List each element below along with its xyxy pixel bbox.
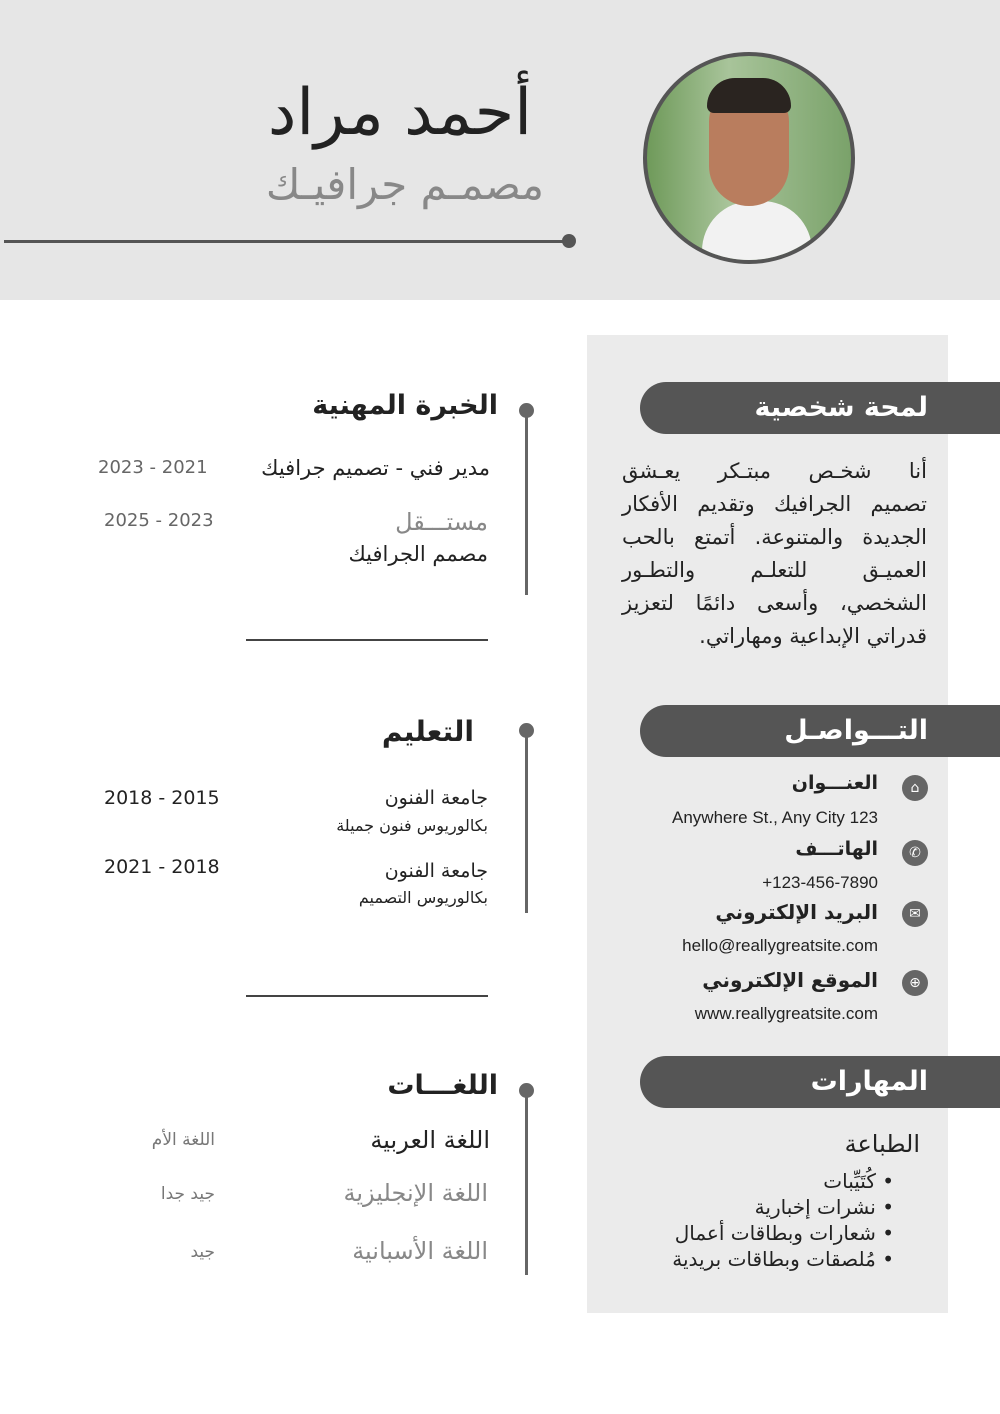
section: languages: جيد جدا	[161, 1184, 215, 1204]
photo	[643, 52, 855, 264]
icon: web: ⊕	[909, 975, 921, 991]
heading: profile	[640, 382, 1000, 434]
icon: web	[902, 970, 928, 996]
profile text: العميـق للتعلـم والتطـور	[622, 558, 927, 582]
section: education: 2021 - 2018	[104, 856, 220, 878]
section: experience: مدير فني - تصميم جرافيك	[261, 456, 490, 480]
section: education: جامعة الفنون	[385, 860, 488, 882]
section: experience: مستـــقل	[395, 508, 488, 536]
contact list: الموقع الإلكتروني	[702, 968, 878, 992]
section: experience	[98, 390, 498, 566]
section: languages: جيد	[190, 1242, 215, 1262]
icon: mail: ✉	[909, 906, 921, 922]
section: languages: اللغة الأسبانية	[352, 1237, 488, 1265]
icon: phone: ✆	[909, 845, 921, 861]
skills list: • نشرات إخبارية	[755, 1195, 894, 1219]
skills list	[672, 1130, 920, 1271]
icon: phone	[902, 840, 928, 866]
skills list: • كُتَيِّبات	[823, 1169, 894, 1193]
name: أحمد مراد	[268, 76, 532, 150]
skills list: • مُلصقات وبطاقات بريدية	[672, 1247, 894, 1271]
heading: skills	[640, 1056, 1000, 1108]
profile text: أنا شخـص مبتـكر يعـشق	[622, 459, 927, 483]
section: experience: 2023 - 2021	[98, 457, 208, 478]
contact list	[672, 772, 928, 1023]
section: languages	[152, 1070, 498, 1265]
header line	[4, 240, 570, 243]
contact list: الهاتـــف	[795, 838, 878, 860]
section: education: بكالوريوس التصميم	[359, 888, 488, 907]
contact list: العنـــوان	[792, 772, 878, 794]
heading: contact: التـــواصـل	[784, 715, 928, 746]
profile text: الشخصي، وأسعى دائمًا لتعزيز	[622, 591, 927, 615]
header band	[0, 0, 1000, 300]
icon: home	[902, 775, 928, 801]
section: education: جامعة الفنون	[385, 787, 488, 809]
section: languages: اللغة الأم	[152, 1130, 215, 1150]
contact list: hello@reallygreatsite.com	[682, 936, 878, 955]
profile text: قدراتي الإبداعية ومهاراتي.	[699, 624, 927, 648]
section: languages: اللغة الإنجليزية	[343, 1179, 488, 1207]
profile text: تصميم الجرافيك وتقديم الأفكار	[622, 492, 927, 516]
section: experience: الخبرة المهنية	[312, 390, 498, 421]
section: education: 2018 - 2015	[104, 787, 220, 809]
section: experience: مصمم الجرافيك	[348, 542, 488, 566]
sidebar panel	[587, 335, 948, 1313]
skills list: الطباعة	[845, 1130, 920, 1158]
section: languages: اللغة العربية	[370, 1126, 490, 1154]
icon: mail	[902, 901, 928, 927]
icon: home: ⌂	[911, 780, 919, 796]
section: education: بكالوريوس فنون جميلة	[336, 816, 488, 835]
contact list: www.reallygreatsite.com	[695, 1004, 878, 1023]
profile text	[621, 457, 927, 648]
heading: profile: لمحة شخصية	[755, 392, 928, 423]
section: education: التعليم	[382, 715, 474, 748]
profile text: الجديدة والمتنوعة. أتمتع بالحب	[622, 525, 927, 549]
job title: مصمـم جرافيـك	[266, 160, 544, 209]
heading: contact	[640, 705, 1000, 757]
skills list: • شعارات وبطاقات أعمال	[675, 1221, 894, 1245]
contact list: البريد الإلكتروني	[715, 900, 878, 924]
section: languages: اللغـــات	[387, 1070, 498, 1101]
section: experience: 2025 - 2023	[104, 510, 214, 531]
section: education	[104, 715, 488, 907]
contact list: Anywhere St., Any City 123	[672, 808, 878, 827]
contact list: +123-456-7890	[762, 873, 878, 892]
heading: skills: المهارات	[811, 1066, 928, 1097]
